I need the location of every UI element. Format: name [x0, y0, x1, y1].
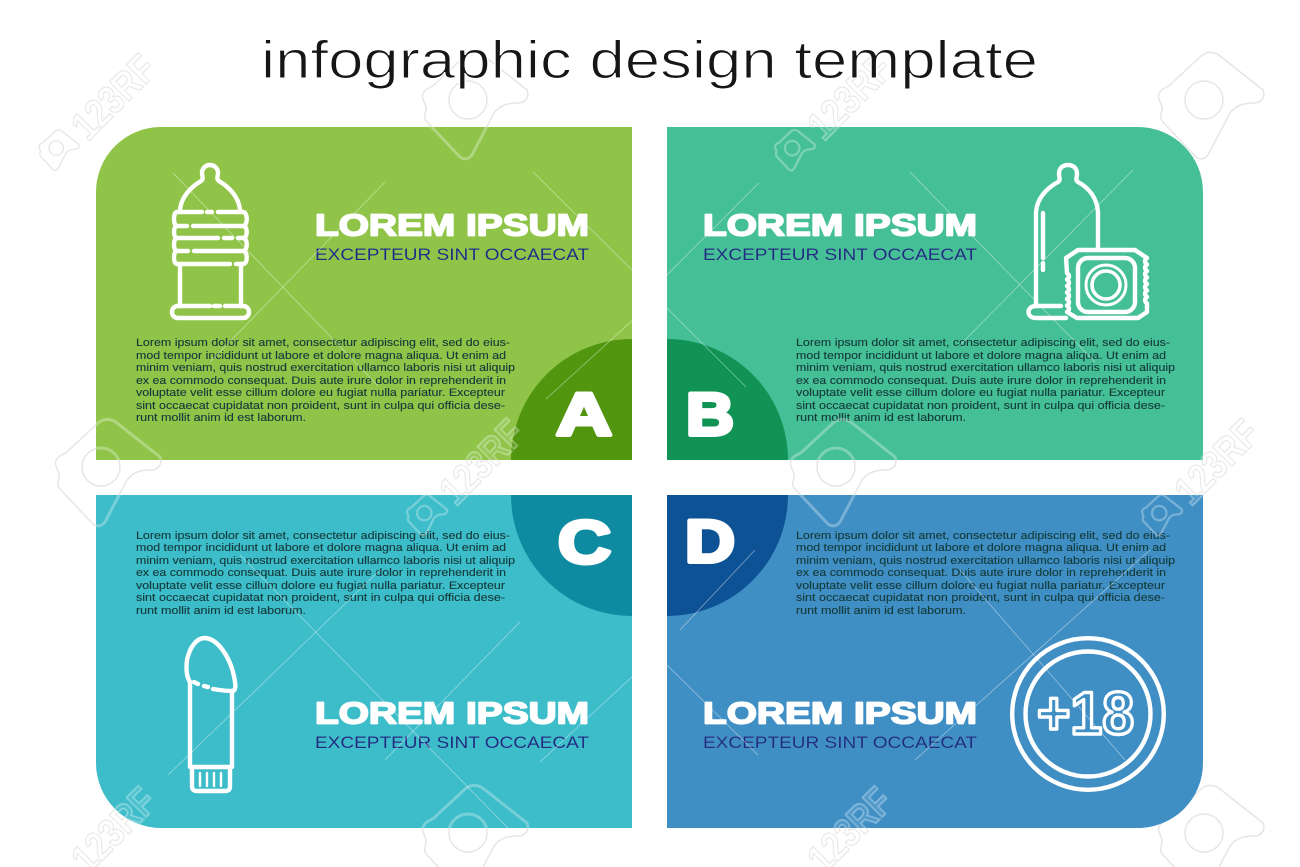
heading C: LOREM IPSUM — [315, 696, 589, 730]
heading D: LOREM IPSUM — [703, 696, 977, 730]
corner badge B: B — [686, 381, 734, 448]
watermarks on background: 123RF — [1166, 412, 1268, 513]
body text D: sint occaecat cupidatat non proident, sunt in culpa qui officia dese- — [796, 592, 1166, 604]
panel: C — [96, 495, 632, 828]
corner badge D: D — [685, 508, 735, 575]
body text A: ex ea commodo consequat. Duis aute irure dolor in reprehenderit in — [136, 375, 506, 387]
body text D — [796, 530, 1175, 617]
title: infographic design template — [261, 31, 1038, 90]
body text B: Lorem ipsum dolor sit amet, consectetur adipiscing elit, sed do eius- — [796, 337, 1171, 349]
corner badge C — [511, 495, 632, 616]
body text D: runt mollit anim id est laborum. — [796, 605, 966, 617]
corner badge D — [667, 495, 788, 616]
body text B: runt mollit anim id est laborum. — [796, 412, 966, 424]
watermarks on background: 123RF — [431, 412, 533, 513]
body text A: voluptate velit esse cillum dolore eu fugiat nulla pariatur. Excepteur — [136, 387, 506, 399]
body text D: Lorem ipsum dolor sit amet, consectetur adipiscing elit, sed do eius- — [796, 530, 1171, 542]
corner badge C: C — [558, 509, 611, 576]
body text D: mod tempor incididunt ut labore et dolore magna aliqua. Ut enim ad — [796, 542, 1166, 554]
body text B: sint occaecat cupidatat non proident, sunt in culpa qui officia dese- — [796, 400, 1166, 412]
body text C: minim veniam, quis nostrud exercitation ullamco laboris nisi ut aliquip — [136, 555, 515, 567]
body text C: runt mollit anim id est laborum. — [136, 605, 306, 617]
subheading D: EXCEPTEUR SINT OCCAECAT — [703, 733, 977, 752]
body text A: minim veniam, quis nostrud exercitation ullamco laboris nisi ut aliquip — [136, 362, 515, 374]
panel: B — [667, 127, 1203, 460]
body text A: mod tempor incididunt ut labore et dolore magna aliqua. Ut enim ad — [136, 350, 506, 362]
panel: A — [96, 127, 632, 460]
body text B: ex ea commodo consequat. Duis aute irure dolor in reprehenderit in — [796, 375, 1166, 387]
body text A: runt mollit anim id est laborum. — [136, 412, 306, 424]
icon: condom and packet — [1028, 165, 1147, 318]
watermarks on background: 123RF — [63, 47, 165, 148]
watermarks on background: 123RF — [799, 47, 901, 148]
icon: shaped device — [186, 638, 235, 791]
body text A — [136, 337, 515, 424]
body text D: minim veniam, quis nostrud exercitation ullamco laboris nisi ut aliquip — [796, 555, 1175, 567]
body text B — [796, 337, 1175, 424]
corner badge A: A — [556, 381, 612, 448]
icon: +18 age badge: +18 — [1037, 680, 1134, 747]
watermarks over panels: 123RF — [1166, 412, 1268, 513]
icon: ribbed condom — [172, 165, 249, 318]
corner badge A — [511, 339, 632, 460]
watermarks over panels: 123RF — [431, 412, 533, 513]
body text B: voluptate velit esse cillum dolore eu fugiat nulla pariatur. Excepteur — [796, 387, 1166, 399]
subheading A: EXCEPTEUR SINT OCCAECAT — [315, 245, 589, 264]
heading A: LOREM IPSUM — [315, 208, 589, 242]
body text C: Lorem ipsum dolor sit amet, consectetur adipiscing elit, sed do eius- — [136, 530, 511, 542]
heading B: LOREM IPSUM — [703, 208, 977, 242]
subheading B: EXCEPTEUR SINT OCCAECAT — [703, 245, 977, 264]
body text D: ex ea commodo consequat. Duis aute irure dolor in reprehenderit in — [796, 567, 1166, 579]
body text C: sint occaecat cupidatat non proident, sunt in culpa qui officia dese- — [136, 592, 506, 604]
thin diagonal lines — [168, 170, 1150, 830]
watermarks over panels — [96, 127, 1203, 828]
panel: D — [667, 495, 1203, 828]
body text B: mod tempor incididunt ut labore et dolore magna aliqua. Ut enim ad — [796, 350, 1166, 362]
subheading C: EXCEPTEUR SINT OCCAECAT — [315, 733, 589, 752]
body text A: Lorem ipsum dolor sit amet, consectetur adipiscing elit, sed do eius- — [136, 337, 511, 349]
corner badge B — [667, 339, 788, 460]
body text B: minim veniam, quis nostrud exercitation ullamco laboris nisi ut aliquip — [796, 362, 1175, 374]
icon: +18 age badge — [1012, 638, 1164, 790]
body text C: mod tempor incididunt ut labore et dolore magna aliqua. Ut enim ad — [136, 542, 506, 554]
body text A: sint occaecat cupidatat non proident, sunt in culpa qui officia dese- — [136, 400, 506, 412]
body text C: ex ea commodo consequat. Duis aute irure dolor in reprehenderit in — [136, 567, 506, 579]
body text C: voluptate velit esse cillum dolore eu fugiat nulla pariatur. Excepteur — [136, 580, 506, 592]
watermarks over panels: 123RF — [799, 47, 901, 148]
body text C — [136, 530, 515, 617]
body text D: voluptate velit esse cillum dolore eu fugiat nulla pariatur. Excepteur — [796, 580, 1166, 592]
